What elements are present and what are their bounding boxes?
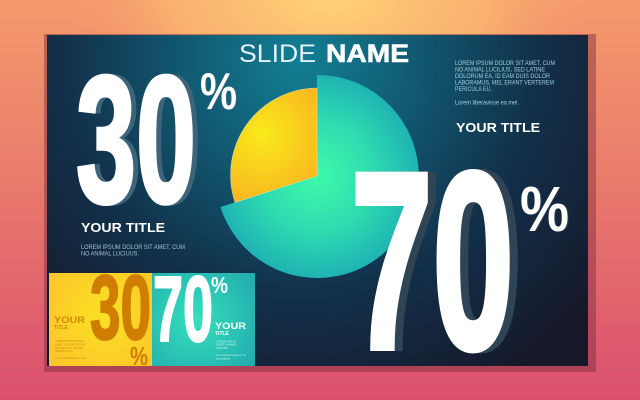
slide shadow frame (44, 34, 596, 372)
left body text: LOREM IPSUM DOLOR SIT AMET, CUM (81, 245, 185, 251)
right body text (455, 61, 555, 106)
card body text: SMET, CONSECTETUR (55, 342, 85, 346)
card body text: Lorem liberavisse ea mel (55, 356, 86, 360)
card percent: % (130, 341, 148, 371)
big number 70 percent: % (521, 173, 570, 245)
card body text: SUSCIPE (216, 346, 228, 350)
big number 30 percent: 30 (76, 39, 196, 241)
card body text (55, 339, 86, 360)
card title: YOUR (215, 321, 247, 331)
card body text: SIGNIFICANT (55, 349, 73, 353)
right body text: DOLORUM EA, ID EAM DUIS DOLOR (455, 74, 551, 80)
big number 30 percent: 30 (81, 39, 201, 241)
title (239, 40, 409, 68)
pie chart (220, 75, 419, 278)
left body text (81, 245, 185, 258)
right body text: LABORAMUS, MEL ERANT VERTEREM (455, 80, 554, 86)
card body text: principes. (216, 356, 231, 360)
right body text: LOREM IPSUM DOLOR SIT AMET, CUM (455, 61, 555, 67)
big number 30 percent: % (201, 63, 238, 121)
right body text: NO ANIMAL LUCILIUS, SED LATINE (455, 68, 545, 74)
card number 70: 70 (153, 257, 213, 361)
card body text: DOLOR AUT LATINE (55, 346, 83, 350)
card body text: LOREM IPSUM (216, 340, 236, 344)
title: NAME (326, 40, 409, 68)
right body text: PERICULA EU. (455, 87, 492, 93)
card body text: SMET, ANIMAL (216, 342, 238, 346)
slide panel (47, 35, 588, 366)
card: yellow 30 percent (49, 257, 152, 371)
big number 70 percent: % (520, 173, 569, 245)
left title: YOUR TITLE (81, 220, 165, 235)
pie slice: 70 percent (220, 75, 419, 278)
card title: YOUR (54, 315, 86, 325)
card: teal 70 percent (152, 257, 255, 366)
card body text (216, 340, 247, 360)
left body text: NO ANIMAL LUCIUUS. (81, 252, 139, 258)
card body text: LOREM IPSUM DOLOR (55, 339, 84, 343)
right body text: Lorem liberavisse ea mel. (455, 100, 519, 106)
pie slice: 30 percent (231, 88, 317, 202)
card percent: % (211, 272, 228, 298)
card number 30: 30 (90, 257, 151, 359)
big number 30 percent: % (200, 63, 237, 121)
card: yellow 30 percent: TITLE (54, 325, 69, 331)
card: teal 70 percent: TITLE (215, 331, 230, 337)
big number 70 percent: 70 (359, 121, 522, 400)
big number 70 percent: 70 (351, 121, 514, 400)
card body text: Our lorem ipsum te (216, 353, 247, 357)
right title: YOUR TITLE (456, 120, 540, 135)
title: SLIDE (239, 40, 316, 68)
